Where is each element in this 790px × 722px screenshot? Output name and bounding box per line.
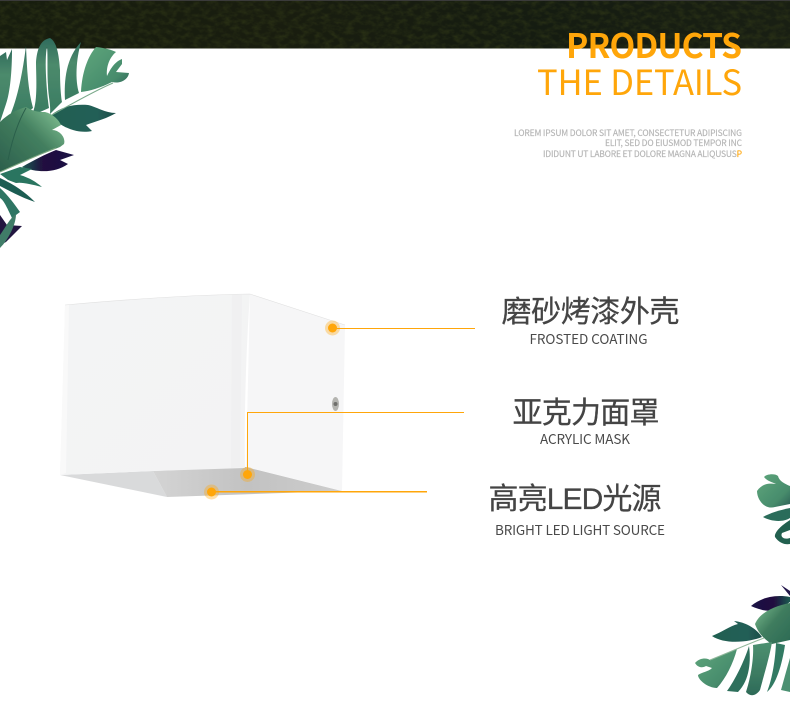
title line: the details: THE DETAILS — [537, 55, 742, 105]
lamp right face — [246, 294, 345, 491]
callout: acrylic mask — [240, 397, 660, 482]
callout: frosted coating — [325, 296, 680, 348]
leaf cluster: right edge — [757, 474, 790, 544]
callout: bright LED light source — [204, 483, 665, 539]
label: LED Chinese: 高亮LED光源 — [488, 483, 662, 516]
label: acrylic mask English: ACRYLIC MASK — [540, 428, 630, 448]
leaf cluster: top left — [0, 38, 129, 248]
leaf cluster: bottom right — [695, 585, 790, 695]
lamp screw — [332, 397, 339, 411]
lamp front face — [60, 294, 250, 475]
label: frosted coating Chinese: 磨砂烤漆外壳 — [502, 296, 680, 329]
intro text — [514, 127, 743, 160]
intro text: LOREM IPSUM DOLOR SIT AMET, CONSECTETUR ADIPISCING — [514, 127, 742, 139]
intro text: IDIDUNT UT LABORE ET DOLORE MAGNA ALIQUSUSP — [543, 148, 742, 160]
label: frosted coating English: FROSTED COATING — [530, 328, 648, 348]
title line: products: PRODUCTS — [566, 19, 742, 68]
intro text: ELIT, SED DO EIUSMOD TEMPOR INC — [605, 137, 743, 149]
grass banner — [0, 0, 790, 48]
product: white cube wall lamp — [60, 294, 345, 497]
label: LED English: BRIGHT LED LIGHT SOURCE — [495, 519, 665, 539]
lamp underside — [60, 471, 167, 497]
label: acrylic mask Chinese: 亚克力面罩 — [512, 397, 660, 430]
